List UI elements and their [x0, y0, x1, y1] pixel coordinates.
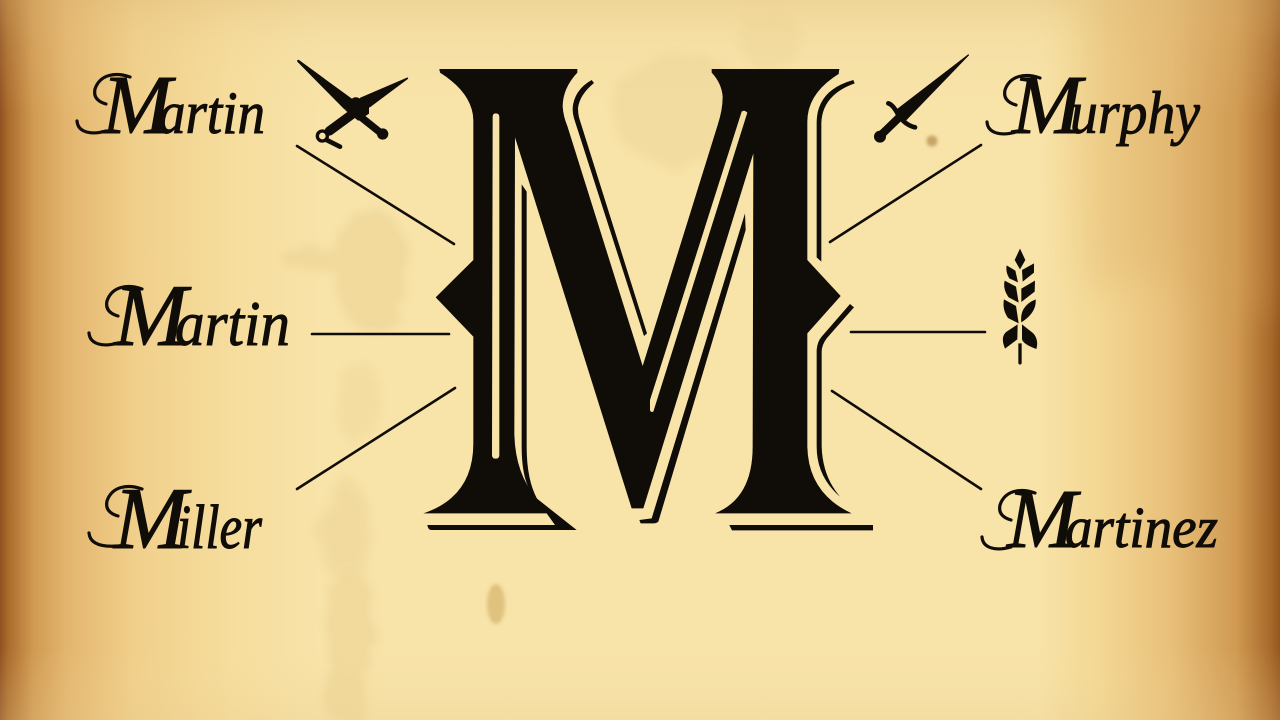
name: Martin (top left): M — [101, 59, 176, 152]
name: Miller — [89, 471, 263, 568]
name: Martin (top left): artin — [158, 80, 265, 146]
name: Martinez: M — [1006, 473, 1081, 566]
name: Martin (middle left) — [89, 268, 290, 365]
decorative letter M — [423, 69, 873, 530]
icon: single sword — [874, 55, 968, 143]
name: Martin (middle left): artin — [175, 288, 290, 359]
name: Martin (top left) — [77, 59, 265, 152]
icon: crossed swords — [298, 61, 407, 147]
name: Murphy: M — [1011, 59, 1086, 152]
name: Martinez: artinez — [1065, 495, 1218, 560]
leader lines — [297, 145, 985, 489]
name: Murphy — [987, 59, 1200, 152]
icon: wheat stalk — [1003, 249, 1037, 365]
name: Martin (middle left): M — [112, 268, 192, 365]
name: Miller: iller — [177, 494, 263, 562]
name: Martinez — [982, 473, 1218, 566]
name: Miller: M — [112, 471, 192, 568]
name: Murphy: urphy — [1070, 80, 1200, 146]
